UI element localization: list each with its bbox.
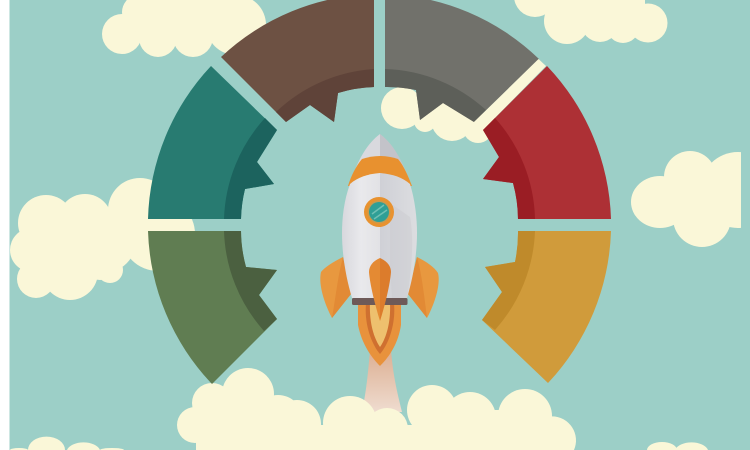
cloud: bottom right small bbox=[647, 442, 708, 450]
cloud: bottom left small bbox=[10, 437, 124, 450]
cloud: behind ring top bbox=[381, 87, 493, 143]
rocket left fin bbox=[320, 257, 351, 318]
rocket body bbox=[342, 173, 417, 298]
cloud: bottom bank bbox=[177, 368, 576, 450]
cream gap between grey and red bbox=[474, 59, 546, 130]
cloud: left bbox=[10, 178, 195, 300]
cloud: top right bbox=[514, 0, 668, 44]
ring segment: red bbox=[483, 66, 611, 219]
ring segment: brown bbox=[221, 0, 374, 122]
rocket centre fin bbox=[369, 258, 391, 321]
rocket bbox=[320, 134, 439, 366]
rocket nose bbox=[349, 134, 411, 186]
ring segment: green bbox=[148, 231, 277, 384]
rocket right fin bbox=[408, 257, 439, 318]
rocket orange band bbox=[348, 156, 412, 186]
rocket exhaust trail bbox=[362, 350, 402, 412]
ring segment: teal bbox=[148, 66, 277, 219]
ring segment: grey bbox=[385, 0, 539, 122]
rocket porthole bbox=[364, 197, 394, 227]
rocket flame bbox=[358, 303, 401, 366]
cloud: top left bbox=[102, 0, 266, 57]
rocket base ring bbox=[352, 298, 408, 305]
cloud: right bbox=[631, 151, 750, 247]
ring segment: yellow bbox=[482, 231, 611, 383]
